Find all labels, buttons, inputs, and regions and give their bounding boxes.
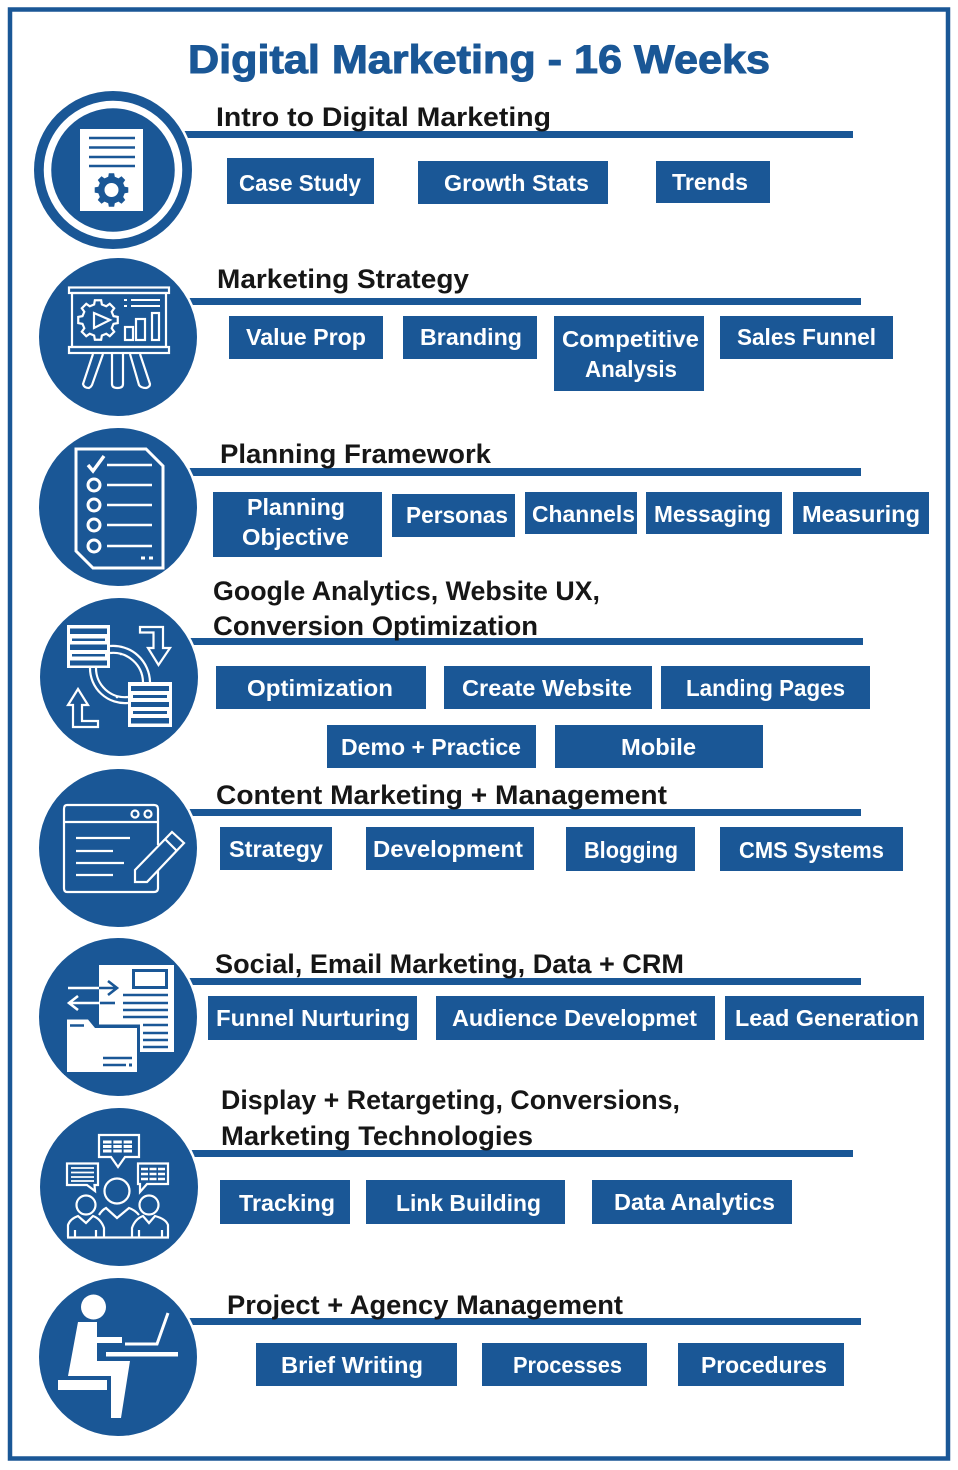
heading: Intro to Digital Marketing (216, 102, 551, 132)
heading: Marketing Strategy (217, 264, 469, 294)
chip: Optimization: Optimization (247, 675, 393, 701)
connector bar (175, 978, 861, 985)
chip: Planning Objective (213, 492, 382, 557)
chip: Processes: Processes (513, 1352, 622, 1378)
icon: person at laptop (36, 1276, 200, 1438)
chip: Optimization (216, 666, 426, 709)
chip: Trends: Trends (672, 169, 748, 195)
connector bar (175, 809, 861, 816)
chip: Measuring: Measuring (802, 501, 920, 527)
heading: Conversion Optimization (213, 611, 538, 641)
icon: team with speech bubbles (38, 1106, 200, 1268)
chip: Measuring (793, 492, 929, 534)
section 5: Content Marketing + Management (36, 766, 903, 930)
section 6: Social, Email Marketing, Data + CRM (36, 936, 924, 1098)
chip: Landing Pages: Landing Pages (686, 675, 845, 701)
heading: Google Analytics, Website UX, (213, 576, 600, 606)
chip: Sales Funnel (720, 316, 893, 359)
chip: Planning Objective: Objective (242, 524, 349, 550)
chip: Personas: Personas (406, 502, 508, 528)
chip: Development: Development (373, 836, 523, 862)
section 7: Display + Retargeting, Conversions, Marketing Technologies (38, 1085, 853, 1268)
connector bar (175, 468, 861, 476)
chip: Create Website (444, 666, 652, 709)
section 1: Intro to Digital Marketing (32, 88, 853, 252)
chip: Branding (403, 316, 537, 359)
chip: Value Prop: Value Prop (246, 324, 366, 350)
chip: Trends (656, 161, 770, 203)
chip: Link Building: Link Building (396, 1190, 541, 1216)
chip: Development (366, 827, 534, 870)
heading: Display + Retargeting, Conversions, (221, 1085, 680, 1115)
chip: Growth Stats (418, 161, 608, 204)
chip: Personas (392, 494, 515, 537)
chip: CMS Systems (720, 827, 903, 871)
heading: Planning Framework (220, 439, 491, 469)
icon: checklist (36, 426, 200, 588)
chip: Tracking (220, 1180, 350, 1224)
chip: Demo + Practice: Demo + Practice (341, 734, 521, 760)
chip: Create Website: Create Website (462, 675, 632, 701)
chip: Growth Stats: Growth Stats (444, 170, 589, 196)
chip: Lead Generation (725, 996, 924, 1040)
chip: Strategy (220, 827, 332, 870)
chip: Landing Pages (661, 666, 870, 709)
chip: Data Analytics: Data Analytics (614, 1189, 775, 1215)
connector bar (176, 638, 863, 645)
heading: Social, Email Marketing, Data + CRM (215, 949, 684, 979)
chip: Funnel Nurturing: Funnel Nurturing (216, 1005, 410, 1031)
chip: Audience Developmet (436, 996, 715, 1040)
chip: Value Prop (229, 316, 383, 359)
chip: Channels (525, 492, 637, 534)
title: Digital Marketing - 16 Weeks (188, 38, 770, 82)
connector bar (170, 131, 853, 138)
chip: Mobile (555, 725, 763, 768)
chip: Sales Funnel: Sales Funnel (737, 324, 876, 350)
chip: Brief Writing (256, 1343, 457, 1386)
section 3: Planning Framework (36, 426, 929, 588)
chip: Blogging: Blogging (584, 837, 678, 863)
chip: Procedures: Procedures (701, 1352, 827, 1378)
icon: browser window and pencil (36, 766, 200, 930)
chip: Messaging (646, 492, 782, 534)
chip: Messaging: Messaging (654, 501, 771, 527)
connector bar (175, 1318, 861, 1325)
chip: Processes (482, 1343, 647, 1386)
chip: Funnel Nurturing (208, 996, 417, 1040)
chip: Link Building (366, 1180, 565, 1224)
chip: Planning Objective: Planning (247, 494, 345, 520)
chip: Tracking: Tracking (239, 1190, 335, 1216)
icon: data stacks and sync arrows (38, 596, 200, 758)
chip: Demo + Practice (327, 725, 536, 768)
chip: Channels: Channels (532, 501, 635, 527)
icon: documents, folder and arrows (36, 936, 200, 1098)
chip: Procedures (678, 1343, 844, 1386)
chip: Data Analytics (592, 1180, 792, 1224)
icon: document with gear (32, 88, 194, 252)
chip: Brief Writing: Brief Writing (281, 1352, 423, 1378)
connector bar (176, 1150, 853, 1157)
chip: CMS Systems: CMS Systems (739, 837, 884, 863)
chip: Mobile: Mobile (621, 734, 696, 760)
section 2: Marketing Strategy (36, 256, 893, 418)
heading: Content Marketing + Management (216, 780, 667, 810)
heading: Marketing Technologies (221, 1121, 533, 1151)
chip: Strategy: Strategy (229, 836, 323, 862)
section 8: Project + Agency Management (36, 1276, 861, 1438)
heading: Project + Agency Management (227, 1290, 623, 1320)
chip: Competitive Analysis: Competitive (562, 326, 699, 352)
chip: Lead Generation: Lead Generation (735, 1005, 919, 1031)
connector bar (175, 298, 861, 305)
chip: Competitive Analysis: Analysis (585, 356, 677, 382)
chip: Audience Developmet: Audience Developmet (452, 1005, 697, 1031)
icon: presentation board (36, 256, 200, 418)
chip: Case Study: Case Study (239, 170, 361, 196)
chip: Competitive Analysis (554, 316, 704, 391)
section 4: Google Analytics, Website UX, Conversion Optimization (38, 576, 870, 768)
chip: Branding: Branding (420, 324, 522, 350)
chip: Case Study (227, 158, 374, 204)
chip: Blogging (566, 827, 695, 871)
